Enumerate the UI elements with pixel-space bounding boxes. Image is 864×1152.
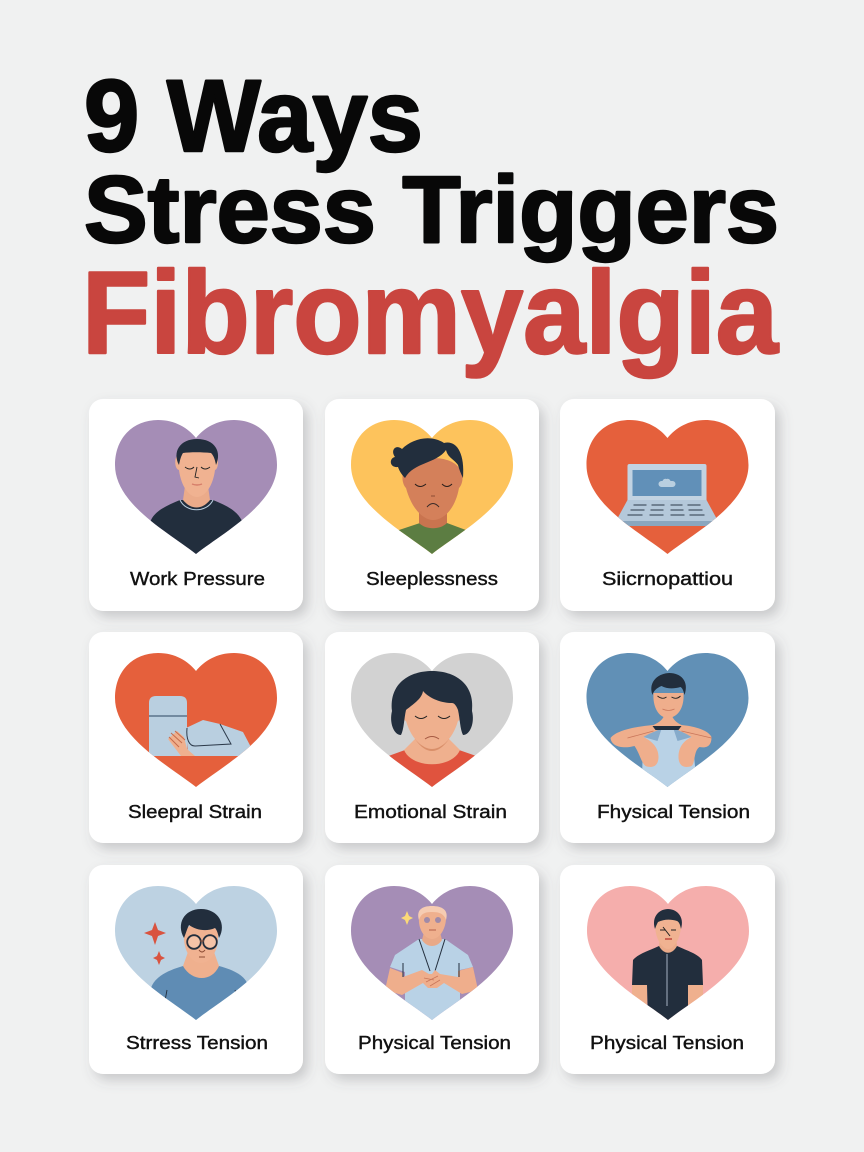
icon: laptop on red heart: [586, 420, 748, 554]
icon: older man with clasped hands on purple heart: [351, 886, 513, 1026]
icon: man in dark shirt on pink heart: [587, 886, 749, 1026]
panel: Siicrnopattiou: [560, 399, 775, 611]
panel: Work Pressure: [89, 399, 303, 611]
title line: 9 Ways: 9 Ways: [84, 59, 423, 173]
icon: man holding neck on blue heart: [586, 653, 748, 793]
title: [82, 59, 779, 378]
label: Sleeplessness: [366, 568, 498, 589]
label: Fhysical Tension: [597, 801, 750, 822]
label: Siicrnopattiou: [602, 568, 733, 589]
icon: pillow and hand on red heart: [115, 653, 277, 787]
title line: Fibromyalgia: Fibromyalgia: [82, 247, 779, 378]
icon: red sparkles: [144, 922, 166, 965]
label: Work Pressure: [130, 568, 265, 589]
panel: Sleeplessness: [325, 399, 539, 611]
label: Strress Tension: [126, 1032, 268, 1053]
panel: Strress Tension: [89, 865, 303, 1074]
label: Physical Tension: [590, 1032, 744, 1053]
label: Emotional Strain: [354, 801, 507, 822]
panel: Sleepral Strain: [89, 632, 303, 843]
label: Physical Tension: [358, 1032, 511, 1053]
icon: woman with short dark hair on grey heart: [351, 653, 513, 793]
icon: person with glasses on pale blue heart: [115, 886, 277, 1026]
label: Sleepral Strain: [128, 801, 262, 822]
panel: Emotional Strain: [325, 632, 539, 843]
icon: yellow sparkle: [401, 911, 413, 925]
icon: man with eyes closed on purple heart: [115, 420, 277, 560]
panel: Physical Tension, older man: [325, 865, 539, 1074]
icon: sad person on yellow heart: [351, 420, 513, 560]
title line: Stress Triggers: Stress Triggers: [84, 157, 779, 263]
panel: Physical Tension, man in black: [560, 865, 775, 1074]
panel: Fhysical Tension: [560, 632, 775, 843]
